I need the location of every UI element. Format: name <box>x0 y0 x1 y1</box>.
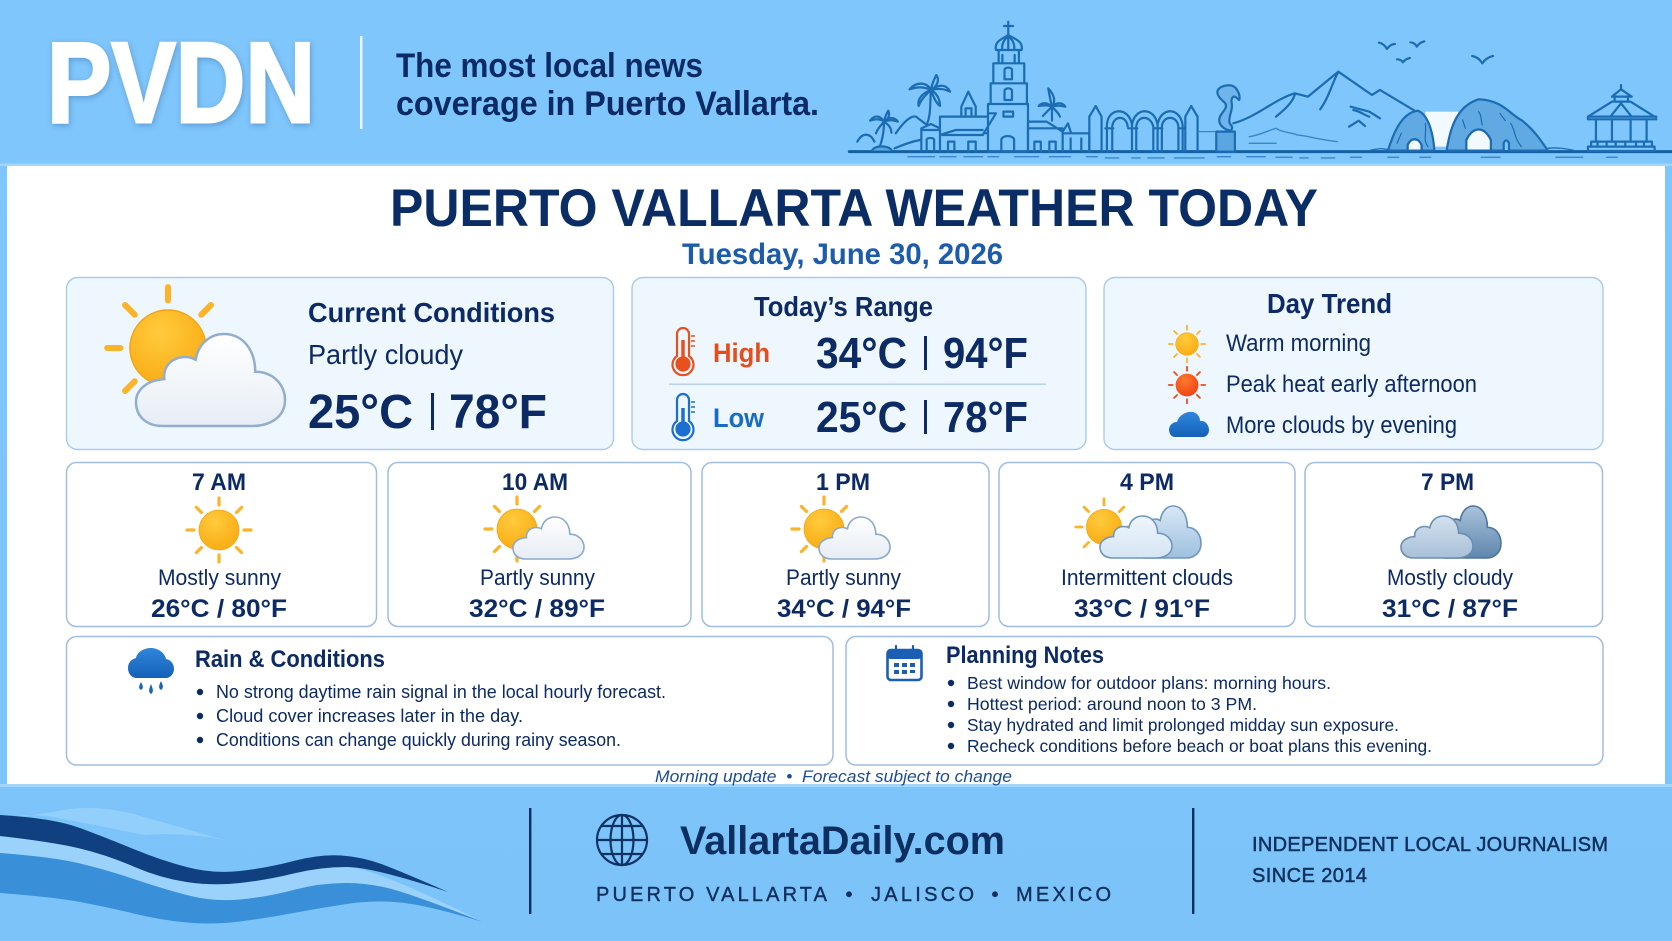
hourly card: 7 PM <box>1305 462 1602 626</box>
temperature: 26°C / 80°F <box>151 595 287 623</box>
independent journalism line: INDEPENDENT LOCAL JOURNALISM <box>1252 834 1608 856</box>
hourly card: 1 PM <box>702 462 989 626</box>
current conditions text <box>308 297 555 439</box>
waterfall <box>1425 112 1458 147</box>
current conditions text: Current Conditions <box>308 297 555 328</box>
wave graphic <box>0 808 483 924</box>
independent journalism line: SINCE 2014 <box>1252 865 1367 887</box>
temperature: 32°C / 89°F <box>469 595 605 623</box>
icon: sun behind cloud <box>107 287 285 426</box>
icon: mostly cloudy <box>1401 506 1501 558</box>
rain bullets: Conditions can change quickly during rainy season. <box>216 729 621 750</box>
location line: JALISCO <box>871 884 974 906</box>
white main panel <box>7 166 1665 784</box>
trend: more clouds: More clouds by evening <box>1226 412 1457 439</box>
tower <box>988 22 1028 152</box>
mountains <box>1233 72 1415 127</box>
planning heading: Planning Notes <box>946 642 1104 669</box>
rain bullets: Cloud cover increases later in the day. <box>216 705 523 726</box>
location line: • <box>845 884 853 906</box>
rain bullets: No strong daytime rain signal in the local hourly forecast. <box>216 681 666 702</box>
current conditions text: 78°F <box>449 386 547 439</box>
arches <box>1089 106 1198 152</box>
header <box>47 20 1672 158</box>
high temperature: 94°F <box>943 329 1028 378</box>
low temperature: 25°C <box>816 393 907 442</box>
gazebo <box>1588 85 1656 151</box>
hourly card: 10 AM <box>388 462 691 626</box>
independent journalism line <box>1252 834 1608 887</box>
icon: sun <box>187 498 251 562</box>
panel: rain and conditions <box>66 636 833 765</box>
icon: hot thermometer <box>673 328 695 375</box>
planning bullets: Recheck conditions before beach or boat plans this evening. <box>967 736 1432 756</box>
birds <box>1379 41 1493 63</box>
icon: calendar <box>888 646 922 680</box>
icon: partly sunny <box>792 497 890 561</box>
condition: Mostly sunny <box>158 565 281 590</box>
tagline: coverage in Puerto Vallarta. <box>396 85 819 123</box>
icon: partly sunny <box>485 497 584 561</box>
planning bullets: Stay hydrated and limit prolonged midday sun exposure. <box>967 715 1399 735</box>
icon: globe <box>597 815 647 865</box>
temperature: 34°C / 94°F <box>777 595 911 623</box>
rock arches <box>1388 111 1434 151</box>
hour label: 10 AM <box>502 469 568 496</box>
temperature: 31°C / 87°F <box>1382 595 1518 623</box>
hour label: 7 AM <box>192 469 246 496</box>
tagline <box>396 47 819 123</box>
day trend heading: Day Trend <box>1267 288 1392 319</box>
current conditions text: 25°C <box>308 386 413 439</box>
trend: warm morning: Warm morning <box>1226 330 1371 357</box>
range heading: Today’s Range <box>754 291 933 322</box>
tagline: The most local news <box>396 47 703 85</box>
condition: Partly sunny <box>480 565 595 590</box>
title: PUERTO VALLARTA WEATHER TODAY <box>390 179 1318 238</box>
rain bullets <box>197 681 666 750</box>
seahorse <box>1216 132 1235 152</box>
trend: peak heat: Peak heat early afternoon <box>1226 371 1477 398</box>
low temperature: 78°F <box>943 393 1028 442</box>
low label: Low <box>713 403 765 433</box>
hour label: 1 PM <box>816 469 870 496</box>
skyline illustration <box>849 22 1672 158</box>
footer divider right <box>1192 808 1194 914</box>
planning bullets: Best window for outdoor plans: morning hours. <box>967 673 1331 693</box>
date: Tuesday, June 30, 2026 <box>682 238 1003 271</box>
condition: Intermittent clouds <box>1061 565 1233 590</box>
high temperature: 34°C <box>816 329 907 378</box>
rain heading: Rain & Conditions <box>195 646 385 673</box>
footer divider left <box>529 808 531 914</box>
temperature: 33°C / 91°F <box>1074 595 1210 623</box>
hills <box>857 116 926 148</box>
hour label: 7 PM <box>1421 469 1474 496</box>
icon: cold thermometer <box>673 394 695 440</box>
condition: Mostly cloudy <box>1387 565 1513 590</box>
location line: • <box>991 884 999 906</box>
palms <box>910 75 950 125</box>
church buildings <box>921 92 1089 152</box>
location line: PUERTO VALLARTA <box>596 884 828 906</box>
location line: MEXICO <box>1016 884 1111 906</box>
condition: Partly sunny <box>786 565 901 590</box>
panel: day trend <box>1104 278 1603 450</box>
high temperature <box>816 329 1028 378</box>
icon: blue cloud <box>1169 412 1209 437</box>
header divider <box>360 36 362 129</box>
icon: warm sun <box>1169 326 1205 362</box>
icon: intermittent clouds <box>1076 499 1201 558</box>
location line <box>596 884 1111 906</box>
icon: hot sun <box>1169 367 1205 403</box>
hour label: 4 PM <box>1120 469 1174 496</box>
low temperature <box>816 393 1028 442</box>
planning bullets: Hottest period: around noon to 3 PM. <box>967 694 1257 714</box>
panel: planning notes <box>846 636 1603 765</box>
range divider <box>669 384 1046 385</box>
panel: today's range <box>632 278 1086 450</box>
panel: current conditions <box>66 278 614 450</box>
hourly card: 7 AM <box>66 462 376 626</box>
logo: PVDN: PVDN <box>47 20 315 147</box>
footer <box>0 808 1608 924</box>
high label: High <box>713 338 770 368</box>
icon: rain cloud <box>128 648 174 694</box>
hourly card: 4 PM <box>999 462 1295 626</box>
website: VallartaDaily.com <box>680 819 1005 863</box>
update note: Morning update • Forecast subject to change <box>655 767 1012 786</box>
planning bullets <box>948 673 1432 756</box>
current conditions text: Partly cloudy <box>308 339 463 370</box>
